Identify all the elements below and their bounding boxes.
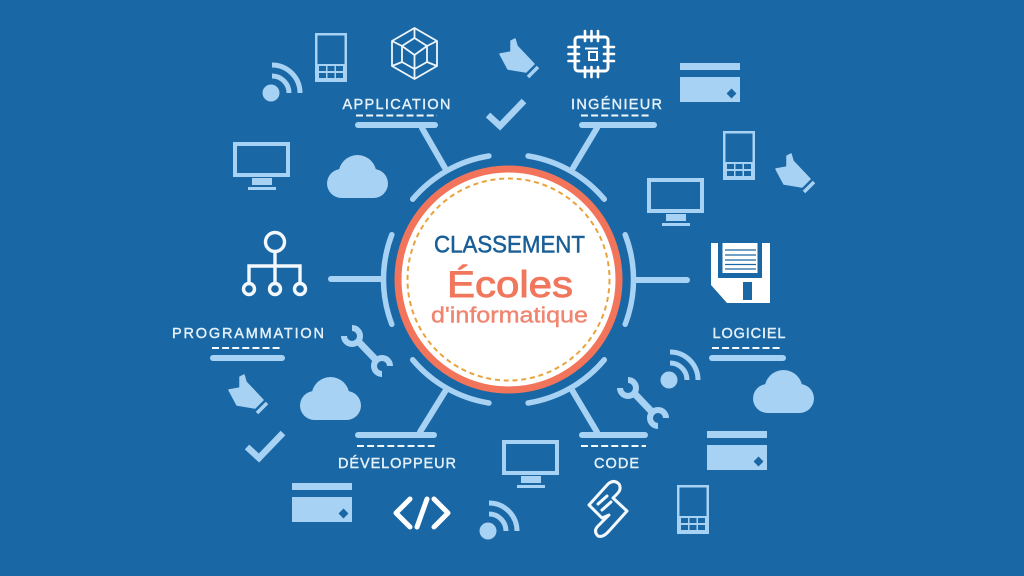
icon: cube <box>392 28 437 79</box>
icon: phone top left <box>316 34 346 81</box>
branch: application: APPLICATION <box>342 97 450 113</box>
branch: développeur: DÉVELOPPEUR <box>338 455 456 472</box>
icon: chip <box>568 31 614 77</box>
branch: code <box>572 390 646 472</box>
branch: logiciel: LOGICIEL <box>712 326 786 342</box>
icon: phone right <box>724 132 754 179</box>
branch: programmation: PROGRAMMATION <box>172 326 324 342</box>
branch: ingénieur: INGÉNIEUR <box>571 96 662 113</box>
icon: card bottom right <box>707 431 767 470</box>
icon: card top right <box>680 63 740 102</box>
heading: classement: CLASSEMENT <box>434 232 585 258</box>
heading: écoles: Écoles <box>447 264 573 305</box>
icon: cloud top left <box>327 155 388 198</box>
icon: wifi bottom <box>480 503 517 540</box>
icon: scroll <box>589 482 627 536</box>
ring arcs <box>383 156 634 403</box>
icon: card bottom left <box>292 483 352 522</box>
icon: monitor right <box>649 180 702 226</box>
icon: hand top <box>500 39 538 77</box>
icon: hand left <box>229 375 267 413</box>
branch: code: CODE <box>594 456 639 472</box>
icon: wrench left <box>344 328 390 374</box>
icon: check top <box>488 101 524 126</box>
icon: cloud bottom left <box>300 377 361 420</box>
icon: floppy disk <box>711 243 770 303</box>
icon: hand right <box>776 154 814 192</box>
icon: cloud right <box>753 370 814 413</box>
icon: code brackets <box>396 499 448 527</box>
icon: monitor left <box>235 144 288 190</box>
icon: phone bottom <box>678 486 708 533</box>
central badge <box>398 169 619 390</box>
icon: org chart <box>244 232 306 294</box>
icon: wrench right <box>620 380 666 426</box>
icon: check bottom left <box>247 433 283 458</box>
branch: développeur <box>338 390 456 472</box>
icon: monitor bottom <box>504 442 557 488</box>
branch: ingénieur <box>571 96 662 168</box>
branch: application <box>342 97 450 168</box>
heading: d'informatique: d'informatique <box>431 302 588 328</box>
icon: wifi right <box>660 352 698 388</box>
icon: wifi left <box>262 65 300 102</box>
